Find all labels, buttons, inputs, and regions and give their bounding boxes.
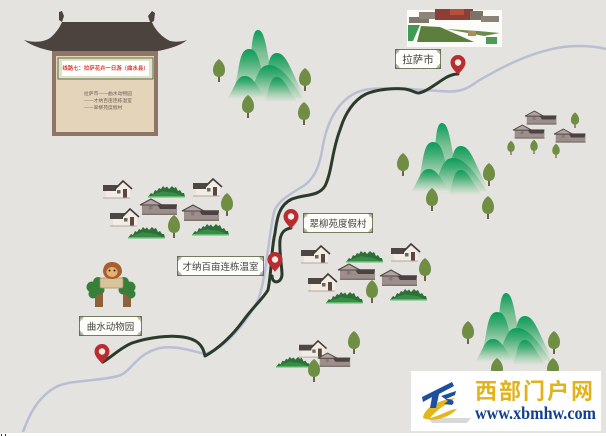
site url: www.xbmhw.com [475, 403, 596, 423]
plaque: route title [58, 58, 153, 79]
zoo gate icon [86, 262, 136, 307]
village: centre [301, 244, 431, 304]
lion mascot [103, 262, 122, 279]
pin: Caina [268, 252, 282, 272]
gate sign [100, 278, 123, 288]
panel: route title board [24, 11, 187, 136]
site name: 西部门户网 [475, 374, 595, 406]
watermark logo panel [411, 371, 601, 431]
label: Lhasa [395, 49, 441, 69]
route description: 拉萨市——曲水动物园 [84, 90, 132, 97]
bottom white strip [0, 433, 606, 436]
pin: Cuiliuyuan [284, 209, 298, 229]
plaque: route title: 线路七：拉萨花卉一日游（曲水县） [62, 64, 149, 72]
Potala Palace illustration [407, 9, 502, 47]
route line [103, 74, 458, 362]
label: Caina greenhouse: 才纳百亩连栋温室 [182, 261, 259, 273]
village: lower centre [276, 331, 360, 382]
mountains and trees: right [397, 123, 495, 219]
route description [84, 90, 132, 111]
village: left [103, 179, 233, 238]
label: Lhasa: 拉萨市 [402, 53, 434, 66]
pin: Lhasa [450, 55, 466, 75]
route description: ——翠柳苑度假村 [84, 104, 123, 111]
village: top right houses [507, 111, 585, 158]
mountains and trees: upper centre [213, 30, 311, 125]
board parchment [56, 56, 154, 132]
pin: Qushui zoo [94, 344, 110, 364]
label: Qushui zoo [79, 316, 142, 336]
temple roof [24, 11, 187, 51]
label: Caina greenhouse [177, 256, 264, 276]
logo mark [422, 382, 471, 423]
label: Qushui zoo: 曲水动物园 [87, 321, 134, 333]
gate pillars [95, 291, 131, 307]
route description: ——才纳百亩连栋温室 [84, 97, 132, 104]
mountains and trees: lower right [462, 293, 560, 381]
label: Cuiliuyuan resort [303, 213, 373, 233]
gate foliage [86, 277, 136, 298]
board frame [52, 50, 158, 136]
label: Cuiliuyuan resort: 翠柳苑度假村 [309, 218, 367, 230]
